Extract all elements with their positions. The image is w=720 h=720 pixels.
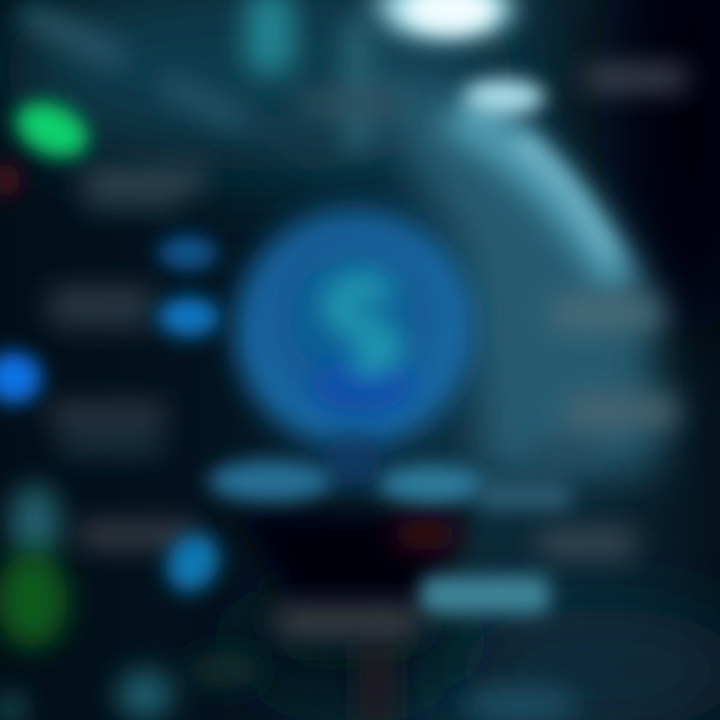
globe symbol [336,286,388,364]
globe [235,210,475,450]
text block: blurred labels right [530,66,687,556]
globe lower shade [312,359,412,411]
globe stem [322,436,382,488]
top highlights [375,0,545,115]
bottom glow marks [0,652,580,720]
text block: blurred labels bottom [275,576,550,636]
pedestal [208,460,572,720]
top streaks [15,0,400,174]
icon: blue dots [0,236,230,601]
icon: flask bottom left [0,484,68,648]
icon: green blob [7,91,97,169]
light dome on the right [360,70,660,480]
icon: red mark [0,163,20,197]
text block: blurred labels left [48,170,207,546]
